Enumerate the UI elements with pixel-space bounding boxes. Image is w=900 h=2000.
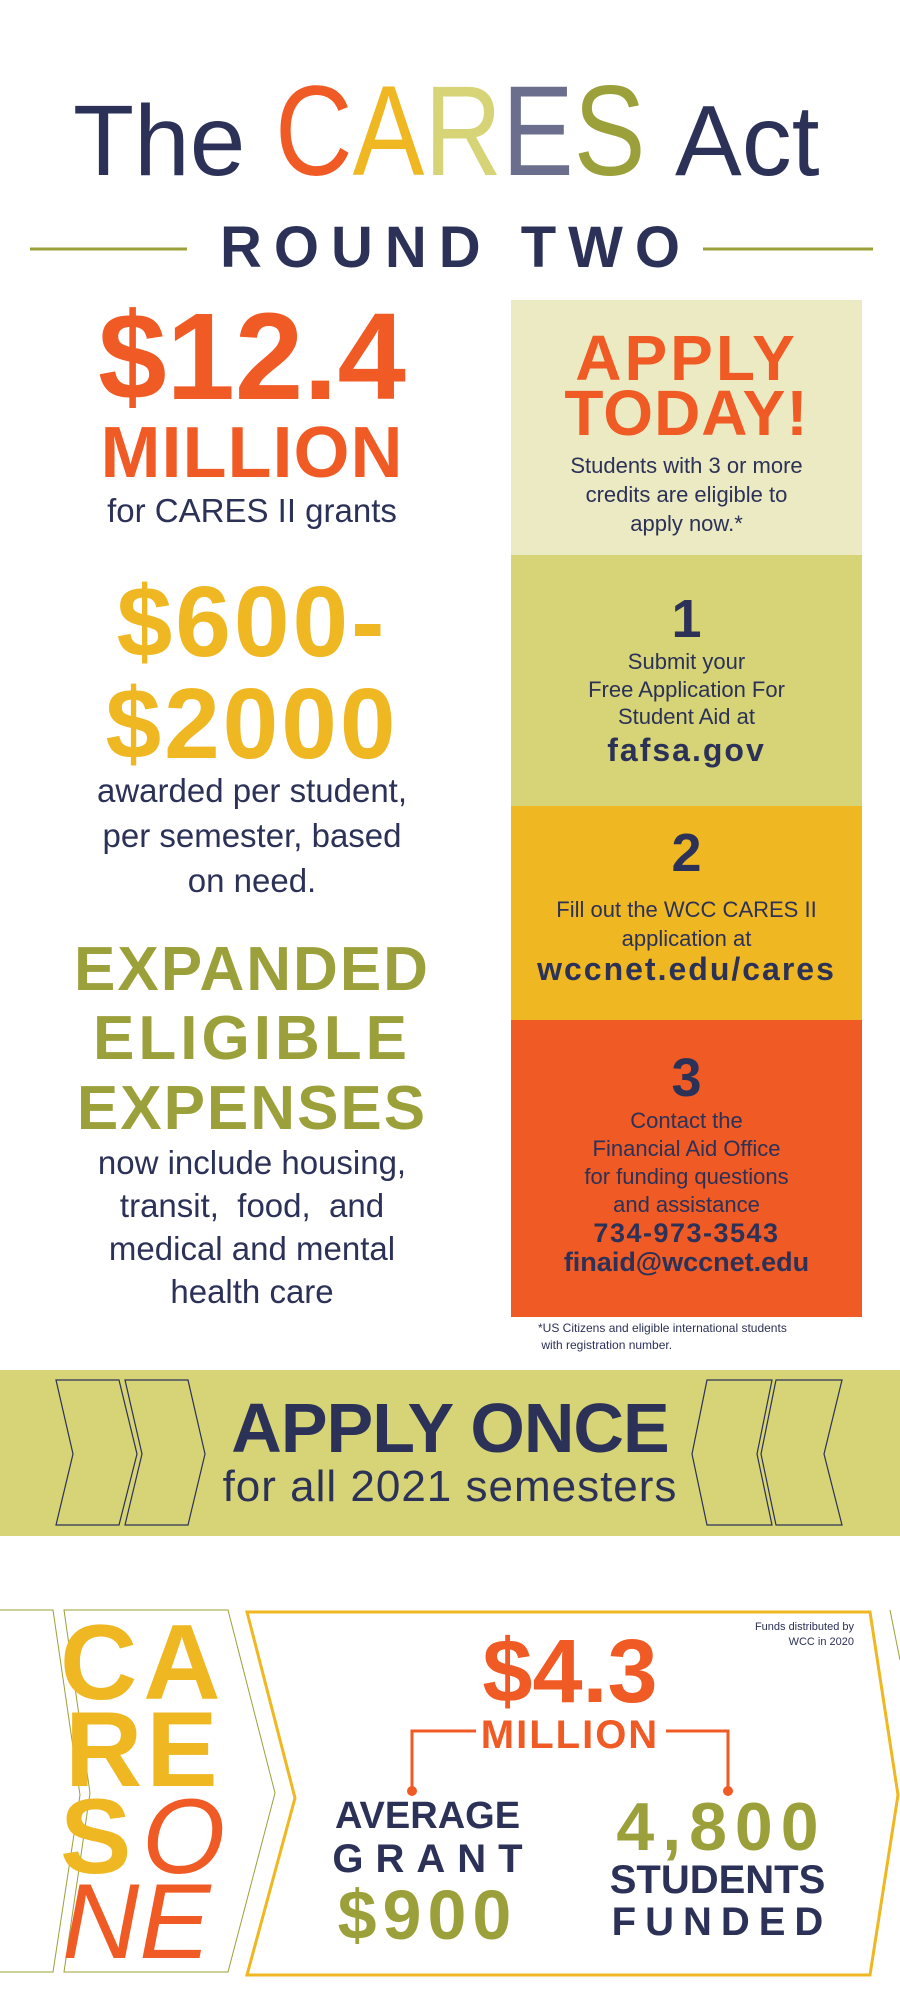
stat: 4.3 million: MILLION [481,1713,659,1757]
cares one logo: O [142,1776,225,1896]
panel: step 3: and assistance [613,1192,760,1217]
title [73,60,819,203]
left stat: 12.4 million: MILLION [101,413,403,493]
left stat: expanded expenses: now include housing, [98,1144,406,1181]
panel: step 3: Contact the [630,1108,743,1133]
banner: apply once [223,1389,677,1511]
panel: step 2: 2 [671,823,702,883]
panel: apply today [511,300,862,555]
panel: step 2: application at [622,926,751,951]
title: CARES [275,60,645,203]
panel: apply today: TODAY! [564,377,809,449]
left stat: expanded expenses: EXPENSES [77,1074,427,1143]
stat: students funded [610,1789,832,1944]
title: Act [675,85,819,197]
stat: students funded: STUDENTS [610,1858,825,1902]
footnote: with registration number. [541,1338,672,1352]
footnote [538,1321,787,1352]
panel: step 2: wccnet.edu/cares [537,951,836,987]
stat: students funded: FUNDED [612,1900,832,1944]
left stat: expanded expenses: EXPANDED [74,935,430,1004]
panel: step 3: for funding questions [584,1164,789,1189]
left stat: expanded expenses: medical and mental [109,1230,395,1267]
cares one logo: NE [62,1861,211,1981]
panel: apply today: APPLY [575,322,798,394]
stat: students funded: 4,800 [616,1789,827,1865]
stat: average grant: AVERAGE [335,1795,520,1837]
title: The [73,85,245,197]
left stat: 12.4 million: $12.4 [98,289,406,426]
panel: step 1: Student Aid at [618,704,755,729]
panel: step 2: Fill out the WCC CARES II [556,897,817,922]
note: funds distributed [755,1621,854,1648]
left stat: award range: $2000 [105,668,399,780]
panel: apply today: apply now.* [630,511,743,536]
panel: step 3: Financial Aid Office [593,1136,780,1161]
left stat: award range: on need. [188,862,316,899]
left stat: award range [97,566,407,899]
panel: step 1 [511,555,862,806]
panel: step 3: 734-973-3543 [593,1218,780,1248]
cares one logo: S [60,1776,131,1896]
left stat: award range: per semester, based [102,817,402,854]
cares one logo [60,1602,227,1981]
cares one logo: RE [65,1689,222,1809]
banner: apply once: for all 2021 semesters [223,1462,677,1511]
stat: average grant: $900 [338,1876,517,1954]
stat: average grant: GRANT [332,1837,535,1881]
bracket connector [407,1730,733,1796]
banner: apply once: APPLY ONCE [231,1389,669,1467]
cares one logo: CA [60,1602,227,1722]
panel: step 1: 1 [671,589,702,649]
left stat: 12.4 million [98,289,406,529]
left stat: 12.4 million: for CARES II grants [107,492,397,529]
footnote: *US Citizens and eligible international students [538,1321,787,1335]
panel: step 1: fafsa.gov [607,732,766,768]
note: funds distributed: Funds distributed by [755,1621,854,1633]
panel: apply today: credits are eligible to [586,482,787,507]
panel: apply today: Students with 3 or more [570,453,803,478]
left stat: expanded expenses: ELIGIBLE [93,1004,411,1073]
panel: step 2 [511,806,862,1020]
stat: average grant [332,1795,535,1954]
panel: step 1: Submit your [628,649,745,674]
panel: step 3: finaid@wccnet.edu [564,1247,809,1277]
note: funds distributed: WCC in 2020 [789,1636,854,1648]
panel: step 1: Free Application For [588,676,785,702]
subtitle: round two: ROUND TWO [220,215,692,280]
left stat: expanded expenses: transit, food, and [120,1187,384,1224]
left stat: expanded expenses [74,935,430,1310]
left stat: award range: awarded per student, [97,772,407,809]
panel: step 3 [511,1020,862,1317]
stat: 4.3 million: $4.3 [482,1622,658,1722]
left stat: expanded expenses: health care [170,1273,334,1310]
left stat: award range: $600- [117,566,387,678]
panel: step 3: 3 [671,1048,702,1108]
